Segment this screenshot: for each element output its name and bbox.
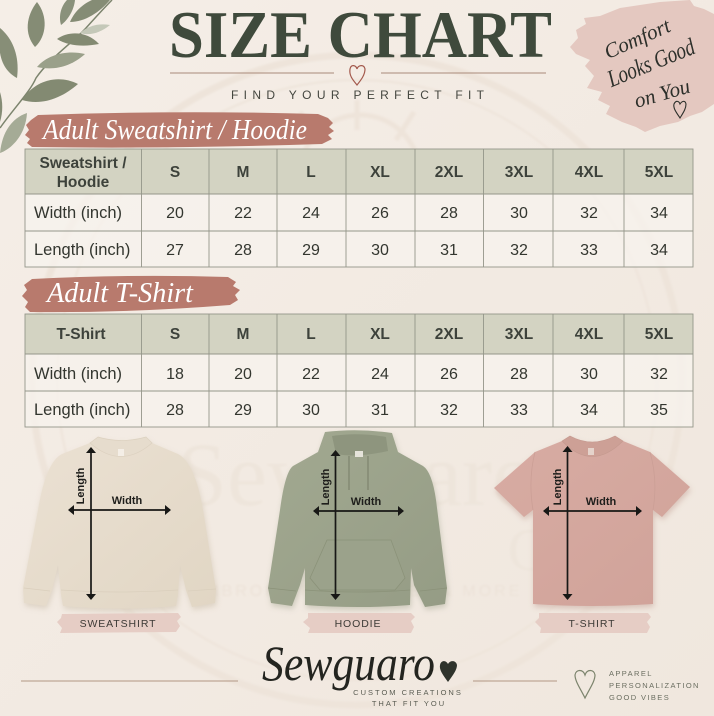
banner: adult t-shirt (22, 276, 240, 312)
garment: sweatshirt (23, 437, 217, 612)
measure arrows: t-shirt (543, 446, 642, 600)
table: t-shirt sizes: 4XL (575, 326, 603, 343)
table: sweatshirt and hoodie sizes: 20 (166, 205, 184, 222)
table: sweatshirt and hoodie sizes: Width (inch) (34, 204, 122, 222)
table: t-shirt sizes: 2XL (435, 326, 463, 343)
table: sweatshirt and hoodie sizes: 29 (302, 242, 320, 259)
table: t-shirt sizes: S (170, 326, 180, 343)
footer divider right (473, 680, 557, 682)
table: sweatshirt and hoodie sizes: Sweatshirt / (40, 155, 127, 172)
table: sweatshirt and hoodie sizes: 33 (580, 242, 598, 259)
table: t-shirt sizes: 22 (302, 366, 320, 383)
table: sweatshirt and hoodie sizes: L (306, 164, 316, 181)
table: t-shirt sizes: 30 (302, 402, 320, 419)
table: sweatshirt and hoodie sizes: Hoodie (57, 174, 110, 191)
table: t-shirt sizes: 30 (580, 366, 598, 383)
callout: comfort looks good on you (570, 0, 714, 132)
table: sweatshirt and hoodie sizes: S (170, 164, 180, 181)
table: sweatshirt and hoodie sizes: 34 (650, 242, 668, 259)
table: sweatshirt and hoodie sizes: XL (370, 164, 390, 181)
table: t-shirt sizes: 28 (510, 366, 528, 383)
icon: outline heart (575, 670, 595, 698)
table: sweatshirt and hoodie sizes: 4XL (575, 164, 603, 181)
table: sweatshirt and hoodie sizes: 31 (440, 242, 458, 259)
watermark logo: Sewguaro (177, 426, 537, 525)
title: SIZE CHART (169, 0, 552, 72)
table: t-shirt sizes (25, 314, 693, 427)
callout: comfort looks good on you: Looks Good (603, 33, 699, 93)
table: t-shirt sizes: L (306, 326, 316, 343)
table: sweatshirt and hoodie sizes: 28 (440, 205, 458, 222)
table: t-shirt sizes: 29 (234, 402, 252, 419)
table: sweatshirt and hoodie sizes: M (237, 164, 249, 181)
table: sweatshirt and hoodie sizes: Length (inch) (34, 241, 130, 259)
table: t-shirt sizes: 33 (510, 402, 528, 419)
subtitle: FIND YOUR PERFECT FIT (231, 88, 485, 102)
table: t-shirt sizes: M (237, 326, 249, 343)
measure arrows: sweatshirt (68, 447, 171, 600)
banner: adult t-shirt: Adult T-Shirt (45, 278, 194, 309)
callout: comfort looks good on you: Comfort (600, 13, 675, 64)
table: t-shirt sizes: 3XL (505, 326, 533, 343)
table: sweatshirt and hoodie sizes: 5XL (645, 164, 673, 181)
table: t-shirt sizes: 24 (371, 366, 389, 383)
garment: t-shirt (494, 436, 691, 609)
measure arrows: sweatshirt: Length (75, 467, 87, 504)
table: sweatshirt and hoodie sizes: 26 (371, 205, 389, 222)
table: sweatshirt and hoodie sizes: 32 (580, 205, 598, 222)
footer divider left (21, 680, 238, 682)
footer tagline list: APPAREL (609, 669, 653, 678)
table: sweatshirt and hoodie sizes: 27 (166, 242, 184, 259)
label: t-shirt: T-SHIRT (569, 618, 615, 630)
table: t-shirt sizes: 32 (650, 366, 668, 383)
watermark logo: Co. (507, 517, 593, 583)
measure arrows: hoodie (313, 450, 404, 600)
table: t-shirt sizes: 34 (580, 402, 598, 419)
table: sweatshirt and hoodie sizes: 32 (510, 242, 528, 259)
measure arrows: t-shirt: Width (586, 496, 616, 508)
label: sweatshirt: SWEATSHIRT (80, 618, 156, 630)
brand logo: THAT FIT YOU (372, 699, 446, 708)
table: sweatshirt and hoodie sizes: 22 (234, 205, 252, 222)
table: sweatshirt and hoodie sizes: 30 (371, 242, 389, 259)
table: t-shirt sizes: XL (370, 326, 390, 343)
label: hoodie (303, 613, 415, 633)
table: sweatshirt and hoodie sizes: 34 (650, 205, 668, 222)
table: sweatshirt and hoodie sizes: 30 (510, 205, 528, 222)
table: t-shirt sizes: 18 (166, 366, 184, 383)
table: t-shirt sizes: 5XL (645, 326, 673, 343)
table: t-shirt sizes: 28 (166, 402, 184, 419)
footer tagline list: GOOD VIBES (609, 693, 670, 702)
measure arrows: t-shirt: Length (552, 468, 564, 505)
title divider with heart (170, 66, 546, 85)
garment: hoodie (268, 430, 448, 610)
table: t-shirt sizes: 20 (234, 366, 252, 383)
table: t-shirt sizes: 35 (650, 402, 668, 419)
icon: leaf branch (0, 0, 112, 153)
table: t-shirt sizes: Length (inch) (34, 401, 130, 419)
table: t-shirt sizes: 26 (440, 366, 458, 383)
callout: comfort looks good on you: on You (631, 74, 693, 113)
footer tagline list (609, 669, 700, 702)
label: t-shirt (535, 613, 651, 633)
label: sweatshirt (57, 613, 181, 633)
label: hoodie: HOODIE (335, 618, 381, 630)
table: sweatshirt and hoodie sizes: 24 (302, 205, 320, 222)
table: t-shirt sizes: Width (inch) (34, 365, 122, 383)
measure arrows: hoodie: Length (320, 468, 332, 505)
table: t-shirt sizes: 32 (440, 402, 458, 419)
footer tagline list: PERSONALIZATION (609, 681, 700, 690)
brand logo: Sewguaro (262, 635, 435, 691)
table: sweatshirt and hoodie sizes: 3XL (505, 164, 533, 181)
watermark logo: EMBROIDERY, APPAREL & MORE (192, 583, 522, 600)
table: sweatshirt and hoodie sizes: 28 (234, 242, 252, 259)
measure arrows: hoodie: Width (351, 496, 381, 508)
table: t-shirt sizes: T-Shirt (56, 326, 106, 343)
table: sweatshirt and hoodie sizes: 2XL (435, 164, 463, 181)
table: sweatshirt and hoodie sizes (25, 149, 693, 267)
brand logo: CUSTOM CREATIONS (353, 688, 463, 697)
table: t-shirt sizes: 31 (371, 402, 389, 419)
measure arrows: sweatshirt: Width (112, 495, 142, 507)
banner: adult sweatshirt hoodie: Adult Sweatshirt / Hoodie (41, 115, 307, 146)
